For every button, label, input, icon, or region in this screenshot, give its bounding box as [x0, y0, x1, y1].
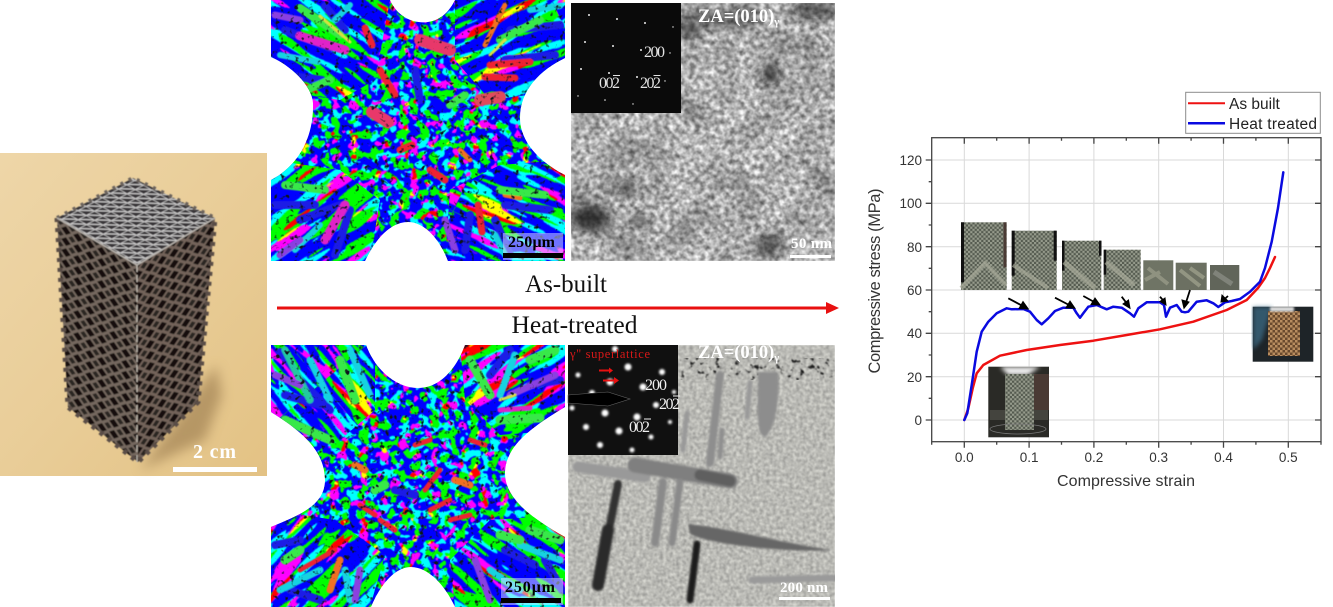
y axis tick labels: 80	[907, 240, 922, 255]
diffraction inset	[568, 345, 680, 455]
zone axis label: ZA=(010)	[698, 7, 774, 27]
inset: specimen after compression	[1253, 307, 1313, 362]
inset labels: 202	[640, 75, 661, 92]
scale label: 50 nm	[791, 236, 832, 252]
panel: TEM heat-treated	[568, 343, 835, 607]
scale label: 250μm	[508, 234, 556, 251]
y axis tick labels: 100	[899, 196, 922, 211]
superlattice label: γ" superlattice	[569, 347, 650, 361]
x axis tick labels: 0.5	[1279, 450, 1298, 465]
legend text: as built: As built	[1229, 96, 1281, 113]
x axis tick labels: 0.0	[955, 450, 974, 465]
legend line: as built	[1188, 102, 1225, 104]
y axis title: Compressive stress (MPa)	[866, 188, 884, 374]
diffraction inset	[571, 3, 681, 113]
panel: TEM as-built	[570, 2, 839, 261]
scale bar	[779, 597, 830, 600]
x axis tick labels	[955, 450, 1298, 465]
scale label: 2 cm	[193, 441, 236, 463]
inset labels: 002	[629, 419, 650, 436]
legend	[1186, 92, 1320, 133]
panel: EBSD map as-built	[271, 0, 565, 261]
arrow: red process arrow	[277, 302, 839, 314]
panel: compressive stress-strain chart	[866, 92, 1321, 490]
scale bar	[501, 598, 561, 603]
inset: specimen before compression	[988, 367, 1049, 437]
superlattice arrows	[599, 368, 619, 384]
inset labels: 200	[644, 44, 665, 61]
legend line: heat treated	[1188, 122, 1225, 125]
inset labels: 200	[645, 377, 667, 394]
heading: Heat-treated: Heat-treated	[512, 310, 638, 339]
scale label: 250μm	[505, 579, 556, 596]
zone axis label: γ	[773, 17, 779, 28]
photo: 3D printed lattice column	[0, 153, 267, 476]
x axis tick labels: 0.4	[1214, 450, 1233, 465]
scale label: 200 nm	[780, 580, 828, 596]
y axis tick labels: 120	[899, 153, 922, 168]
x axis title: Compressive strain	[1057, 473, 1195, 490]
lattice column	[57, 178, 215, 462]
y axis tick labels: 0	[914, 413, 922, 428]
curve: as built	[964, 257, 1275, 420]
legend text: heat treated: Heat treated	[1229, 116, 1317, 133]
scale bar	[503, 253, 563, 258]
scale bar	[173, 467, 257, 472]
x axis tick labels: 0.1	[1020, 450, 1038, 465]
y axis tick labels: 20	[907, 370, 922, 385]
scale backing	[503, 233, 563, 260]
inset labels	[599, 44, 665, 92]
zone axis label: γ	[773, 353, 779, 364]
x axis tick labels: 0.2	[1085, 450, 1103, 465]
cast shadow	[140, 365, 222, 470]
y axis tick labels	[899, 153, 922, 428]
inset labels	[629, 377, 680, 436]
zone axis label: ZA=(010)	[698, 343, 774, 363]
heading: As-built: As-built	[525, 271, 607, 298]
inset labels: 002	[599, 75, 620, 92]
x axis tick labels: 0.3	[1149, 450, 1168, 465]
arrows: failure events	[1008, 290, 1228, 309]
curve: heat treated	[964, 172, 1283, 420]
beam stop	[568, 392, 630, 406]
scale backing	[501, 578, 563, 605]
chart axes	[926, 138, 1321, 448]
chart grid	[932, 138, 1321, 441]
y axis tick labels: 60	[907, 283, 922, 298]
panel: EBSD map heat-treated	[271, 345, 565, 607]
scale bar	[790, 255, 831, 258]
inset: compression sequence photos	[961, 222, 1239, 290]
inset labels: 202	[659, 396, 680, 413]
y axis tick labels: 40	[907, 326, 922, 341]
